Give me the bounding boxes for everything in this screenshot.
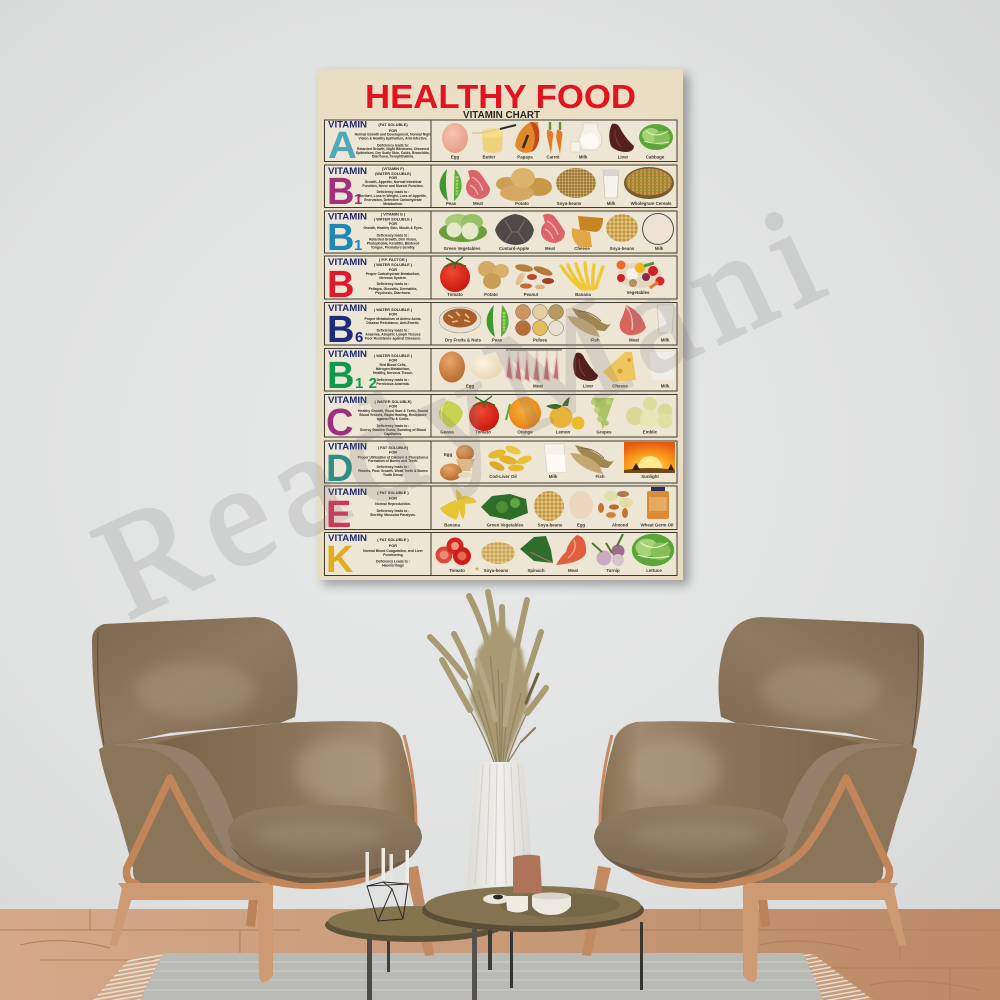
panel: vitamin B6: 6 [355,329,363,346]
panel: vitamin B1 (vitamin G) [324,211,677,259]
panel: vitamin K: VITAMIN [328,533,367,544]
panel: vitamin B (P.P. factor): ( P.P. FACTOR ) [379,257,408,262]
panel: vitamin E: VITAMIN [328,487,367,498]
food: tomato: Tomato [447,292,463,297]
food: guava [439,400,463,434]
food: peanut [514,263,554,297]
food: milk jug: Milk [579,154,588,160]
food: fish [570,445,614,479]
food: soya-beans [606,214,638,251]
panel: vitamin B1 (vitamin F): Function, Nerve and Muscle Function. [362,184,424,188]
panel: vitamin B12: Healthy, Nervous Tissue. [373,371,413,375]
panel: vitamin K: Deficiency Leads to : [376,560,410,564]
food: milk glass [603,170,619,206]
food: milk jug: Milk [549,474,558,479]
panel: vitamin A: FOR [389,128,397,133]
small round table [325,906,505,1000]
panel: vitamin B1 (vitamin F): Beriberi, Loss in Weight, Loss of Appetite, [359,194,427,198]
watermark: ReadyMani [73,177,844,649]
food: meat: Meat [545,246,556,251]
arm and back [150,721,416,860]
food: butter [472,125,516,160]
food: peas: Peas [446,201,457,206]
food: milk glass: Milk [661,338,670,342]
panel: vitamin A [324,120,677,167]
food: vegetables: Vegetables [627,290,650,295]
food: potato [478,261,509,297]
food: papaya: Papaya [517,154,533,160]
food: cabbage [639,124,673,160]
panel: vitamin D: Rickets, Poor Growth, Weak Teeth & Bones [358,469,428,473]
food: meat [541,214,565,251]
panel: vitamin B6: ( WATER SOLUBLE ) [374,307,413,312]
panel: vitamin D: D [326,448,353,490]
panel: vitamin B6: Proper Metabolism of Amino Acids. [364,317,422,321]
panel: vitamin B12: FOR [389,358,397,362]
food: sunlight: Sunlight [641,474,659,479]
food: soya-beans [556,168,596,206]
food: tomato slices: Tomato [449,568,465,573]
food: potato: Potato [484,292,498,297]
food: meat [620,305,646,342]
food: custard-apple: Custard-Apple [499,246,530,251]
panel: vitamin B1 (vitamin G): Tongue, Premature Senility. [371,246,415,250]
food: lettuce: Lettuce [646,568,662,573]
front arm roll [110,743,240,872]
food: banana [440,489,477,528]
food: soya-beans: Soya-beans [610,246,635,251]
food: almond: Almond [612,522,628,528]
panel: vitamin C: Scurvy Swollen Gums, Bursting of Blood [360,428,426,432]
panel: vitamin D: Formation of Bones and Teeth. [368,459,418,463]
food: milk glass [649,352,674,388]
food: milk bowl [642,213,674,251]
food: sunlight [624,442,675,479]
food: hanging meat [506,350,562,388]
food: carrot [546,122,562,160]
food: eggs in cup: Egg [444,452,452,457]
panel: vitamin B (P.P. factor): Pellagra, Glossitis, Dermatitis, [369,287,417,291]
food: custard-apple [495,214,534,251]
food: turnip: Turnip [606,568,620,573]
right armchair [582,617,924,982]
food: soya-beans [534,491,564,528]
food: banana [561,263,603,297]
panel: vitamin B12: VITAMIN [328,349,367,360]
panel: vitamin D: Tooth Decay [383,473,403,477]
panel: vitamin D: Deficiency leads to : [377,465,409,469]
panel: vitamin K: Haemorrhage [382,564,404,568]
panel: vitamin E: E [326,494,351,536]
food: orange [506,397,541,434]
panel: vitamin D: VITAMIN [328,442,367,452]
food: soya-beans: Soya-beans [484,568,509,573]
food: hanging meat: Meat [533,384,544,388]
panel: vitamin B1 (vitamin G): Photophobia, Keratitis, Blistered [367,242,419,246]
candle holder with candles [366,848,409,921]
panel: vitamin B1 (vitamin F): 1 [354,191,362,208]
food: egg [442,123,468,160]
food: banana: Banana [575,292,591,297]
food: meat: Meat [473,201,484,206]
panel: vitamin C: Blood Vessels, Rapid Healing, Resistance [359,413,427,417]
panel: vitamin B1 (vitamin G): ( WATER SOLUBLE ) [374,216,413,222]
panel: vitamin B (P.P. factor): B [327,264,354,306]
poster paper [318,69,683,580]
panel: vitamin C: Capillaries. [384,432,402,436]
food: cheese [603,352,636,388]
food: guava: Guava [440,430,454,434]
food: lettuce [632,534,674,573]
food: lemon: Lemon [556,430,571,434]
back leg [405,866,434,956]
food: grapes: Grapes [596,430,612,434]
panel: vitamin B (P.P. factor): VITAMIN [328,257,367,268]
food: egg [569,491,593,528]
panel: vitamin B6: Deficiency leads to : [377,328,409,332]
food: grapes [591,398,614,434]
panel: vitamin B1 (vitamin G): Deficiency leads to : [377,234,409,238]
food: banana: Banana [444,522,460,528]
food: cheese [572,216,603,251]
panel: vitamin B6: VITAMIN [328,303,367,314]
panel: vitamin E: ( FAT SOLUBLE ) [377,490,409,495]
tableware [483,855,571,915]
panel: vitamin C: ( WATER SOLUBLE) [374,399,412,404]
food: potato: Potato [515,201,529,206]
food: green vegetables [439,214,487,251]
food: pulses [516,304,564,342]
panel: vitamin B12: ( WATER SOLUBLE ) [374,353,413,358]
inner back leg [246,898,258,927]
food: milk jug [571,123,602,160]
seat cushion [228,805,422,873]
wooden floor [0,909,1000,1000]
poster shadow [323,74,689,585]
food: lemon [546,397,584,434]
panel: vitamin D: ( FAT SOLUBLE) [378,445,409,450]
food: turnip [592,534,624,573]
panel: vitamin B (P.P. factor): Proper Carbohydrate Metabolism, [366,272,420,276]
under-seat band [230,838,420,883]
panel: vitamin B (P.P. factor): FOR [389,267,397,272]
large round table [422,886,644,1000]
food: cheese: Cheese [612,384,628,388]
panel: vitamin E [324,486,677,536]
food: eggs in cup [440,445,475,480]
panel: vitamin K: ( FAT SOLUBLE ) [377,537,409,542]
panel: vitamin B12: Deficiency leads to : [377,378,409,382]
panel: vitamin A: Deficiency leads to: [377,144,409,148]
food: tomato [440,257,470,297]
panel: vitamin A: (FAT SOLUBLE) [378,122,408,127]
food: soya-beans: Soya-beans [538,522,563,528]
panel: vitamin B1 (vitamin G): B [327,217,354,259]
food: wholegrain cereals [624,167,674,206]
food: fish: Fish [595,474,605,479]
food: milk bowl: Milk [655,246,664,251]
food: liver: Liver [618,154,629,160]
panel: vitamin B6: B [327,309,354,351]
panel: vitamin B6: Disease Resistance, Anti-Emetic. [366,321,420,325]
panel: vitamin A: Vision & Healthy Epithelium, Anti-Infective. [358,136,428,140]
panel: vitamin C: Healthy Growth, Good Gum & Teeth, Sound [358,409,428,413]
panel: vitamin K: FOR [389,543,397,548]
food: liver: Liver [583,384,594,388]
food: egg: Egg [451,154,459,160]
food: soya-beans: Soya-beans [557,201,582,206]
panel: vitamin E: Normal Reproduction. [375,502,411,506]
food: green vegetables [481,494,528,528]
front legs and rail [110,883,273,982]
panel: vitamin B1 (vitamin G): Growth, Healthy Skin, Mouth & Eyes. [363,226,423,230]
panel: vitamin B6: Poor Resistance against Diseases. [365,336,421,340]
panel: vitamin B1 (vitamin F): Deficiency leads to : [377,190,409,194]
food: meat: Meat [629,338,640,342]
panel: vitamin B1 (vitamin F) [324,165,677,213]
panel: vitamin B (P.P. factor): ( WATER SOLUBLE ) [374,262,413,267]
panel: vitamin B1 (vitamin F): Growth, Appetite, Normal Intestinal [365,180,421,184]
panel: vitamin B6 [324,302,677,351]
chair shell [99,721,416,886]
food: tomato slices [436,538,471,573]
panel: vitamin A: Diarrhoea, Xerophthalmia. [372,155,414,159]
food: green vegetables: Green Vegetables [487,522,524,528]
food: spinach [520,536,553,573]
food: egg: Egg [466,384,474,388]
panel: vitamin E: Deficiency leads to : [377,509,409,513]
panel: vitamin E: Sterility, Muscular Paralysis. [370,513,416,517]
rug [93,953,873,1000]
food: cod-liver oil [487,444,533,479]
panel: vitamin A: Normal Growth and Development, Normal Night [355,132,432,136]
food: milk glass: Milk [661,384,670,388]
food: dry fruits and nuts: Dry Fruits & Nuts [445,338,482,342]
food: pulses: Pulses [533,338,548,342]
food: tomato [469,396,499,434]
left armchair [92,617,434,982]
panel: vitamin A: A [328,125,357,167]
panel: vitamin B1 (vitamin G): VITAMIN [328,212,367,222]
food: cabbage: Cabbage [646,154,665,160]
poster [318,69,683,581]
food: fish: Fish [590,338,600,342]
panel: vitamin B1 (vitamin G): 1 [354,237,362,254]
food: liver [609,124,634,160]
food: soya-beans [476,542,515,573]
panel: vitamin B1 (vitamin F): B [327,171,354,213]
panel: vitamin B1 (vitamin F): FOR [389,175,397,180]
panel: vitamin D [324,441,677,490]
food: almond [598,491,633,528]
panel: vitamin A: Epithelium, Dry Scaly Skin, Colds, Bronchitis, [356,151,430,155]
food: spinach: Spinach [527,568,545,573]
food: cod-liver oil: Cod-Liver Oil [489,474,517,479]
food: green vegetables: Green Vegetables [444,246,481,251]
food: peas [487,305,509,342]
vase [467,762,533,887]
panel: vitamin B12: Nitrogen Metabolism, [376,367,410,371]
food: peanut: Peanut [524,292,539,297]
panel: vitamin A: VITAMIN [328,120,367,130]
subtitle: VITAMIN CHART [463,110,540,121]
food: egg: Egg [577,522,585,528]
panel: vitamin C: Deficiency leads to : [377,424,409,428]
wooden frame [126,778,412,885]
panel: vitamin B1 (vitamin F): Metabolism. [383,202,403,206]
food: peas [440,169,462,206]
panel: vitamin A: Retarded Growth, Night Blindness, Diseased [357,147,429,151]
food: liver [573,353,598,388]
panel: vitamin D: FOR [389,450,397,454]
panel: vitamin B6: FOR [389,312,397,316]
panel: vitamin B1 (vitamin G): Retarded Growth, Dim Vision, [369,238,417,242]
panel: vitamin B (P.P. factor) [324,256,677,306]
food: egg [439,352,502,388]
panel: vitamin B12: Red Blood Cells, [380,363,407,367]
panel: vitamin B (P.P. factor): Nervous System. [379,276,407,280]
food: emblic [626,397,672,434]
panel: vitamin B12: 12 [355,375,377,392]
panel: vitamin C: C [326,402,353,444]
panel: vitamin K: Normal Blood Coagulation, and Liver [363,549,424,553]
food: meat: Meat [568,568,579,573]
food: tomato: Tomato [475,430,491,434]
food: potato [496,168,552,206]
food: emblic: Emblic [643,430,658,434]
food: cheese: Cheese [574,246,590,251]
panel: vitamin B1 (vitamin F): (VITAMIN F) [382,166,405,171]
panel: vitamin B12: B [327,355,354,397]
food: wheat germ oil: Wheat Germ Oil [641,522,673,528]
plant: dried pampas grass [430,592,546,762]
food: carrot: Carrot [546,154,560,160]
food: meat [556,535,586,573]
food: milk jug [544,444,566,479]
panel: vitamin B12 [324,348,677,397]
panel: vitamin B1 (vitamin G): FOR [389,221,397,226]
panel: vitamin C [324,394,677,444]
panel: vitamin B (P.P. factor): Deficiency leads to : [377,282,409,286]
headrest [92,617,298,747]
food: milk glass [657,305,674,342]
panel: vitamin B1 (vitamin F): Enervation, Defective Carbohydrate [364,198,422,202]
title: HEALTHY FOOD [365,78,636,115]
food: wheat germ oil [641,487,673,528]
panel: vitamin K: Functioning [383,553,403,557]
panel: vitamin B1 (vitamin G): ( VITAMIN G ) [381,212,406,216]
food: dry fruits and nuts [439,307,482,342]
panel: vitamin B1 (vitamin F): VITAMIN [328,166,367,177]
panel: vitamin C: against Flu & Colds. [377,417,409,421]
food: orange: Orange [517,430,533,434]
food: meat [466,170,490,206]
panel: vitamin B (P.P. factor): Psychosis, Diarrhoea. [375,291,411,295]
food: vegetables [616,260,664,295]
panel: vitamin K [324,532,677,581]
panel: vitamin C: FOR [389,404,397,408]
food: wholegrain cereals: Wholegram Cereals [630,201,672,206]
food: papaya [515,122,539,160]
panel: vitamin K: K [326,539,354,581]
panel: vitamin B6: Anaemia, Atrophic Lymph Tissues [365,332,421,336]
panel: vitamin C: VITAMIN [328,395,367,406]
food: butter: Butter [483,154,496,160]
food: fish [567,308,611,342]
panel: vitamin B12: Pernicious Anaemia. [376,382,410,386]
panel: vitamin E: FOR [389,496,397,500]
food: milk glass: Milk [607,201,616,206]
panel: vitamin B1 (vitamin F): (WATER SOLUBLE) [375,171,412,176]
panel: vitamin D: Proper Utilisation of Calcium & Phosphorus [358,456,428,460]
food: peas: Peas [492,338,503,342]
